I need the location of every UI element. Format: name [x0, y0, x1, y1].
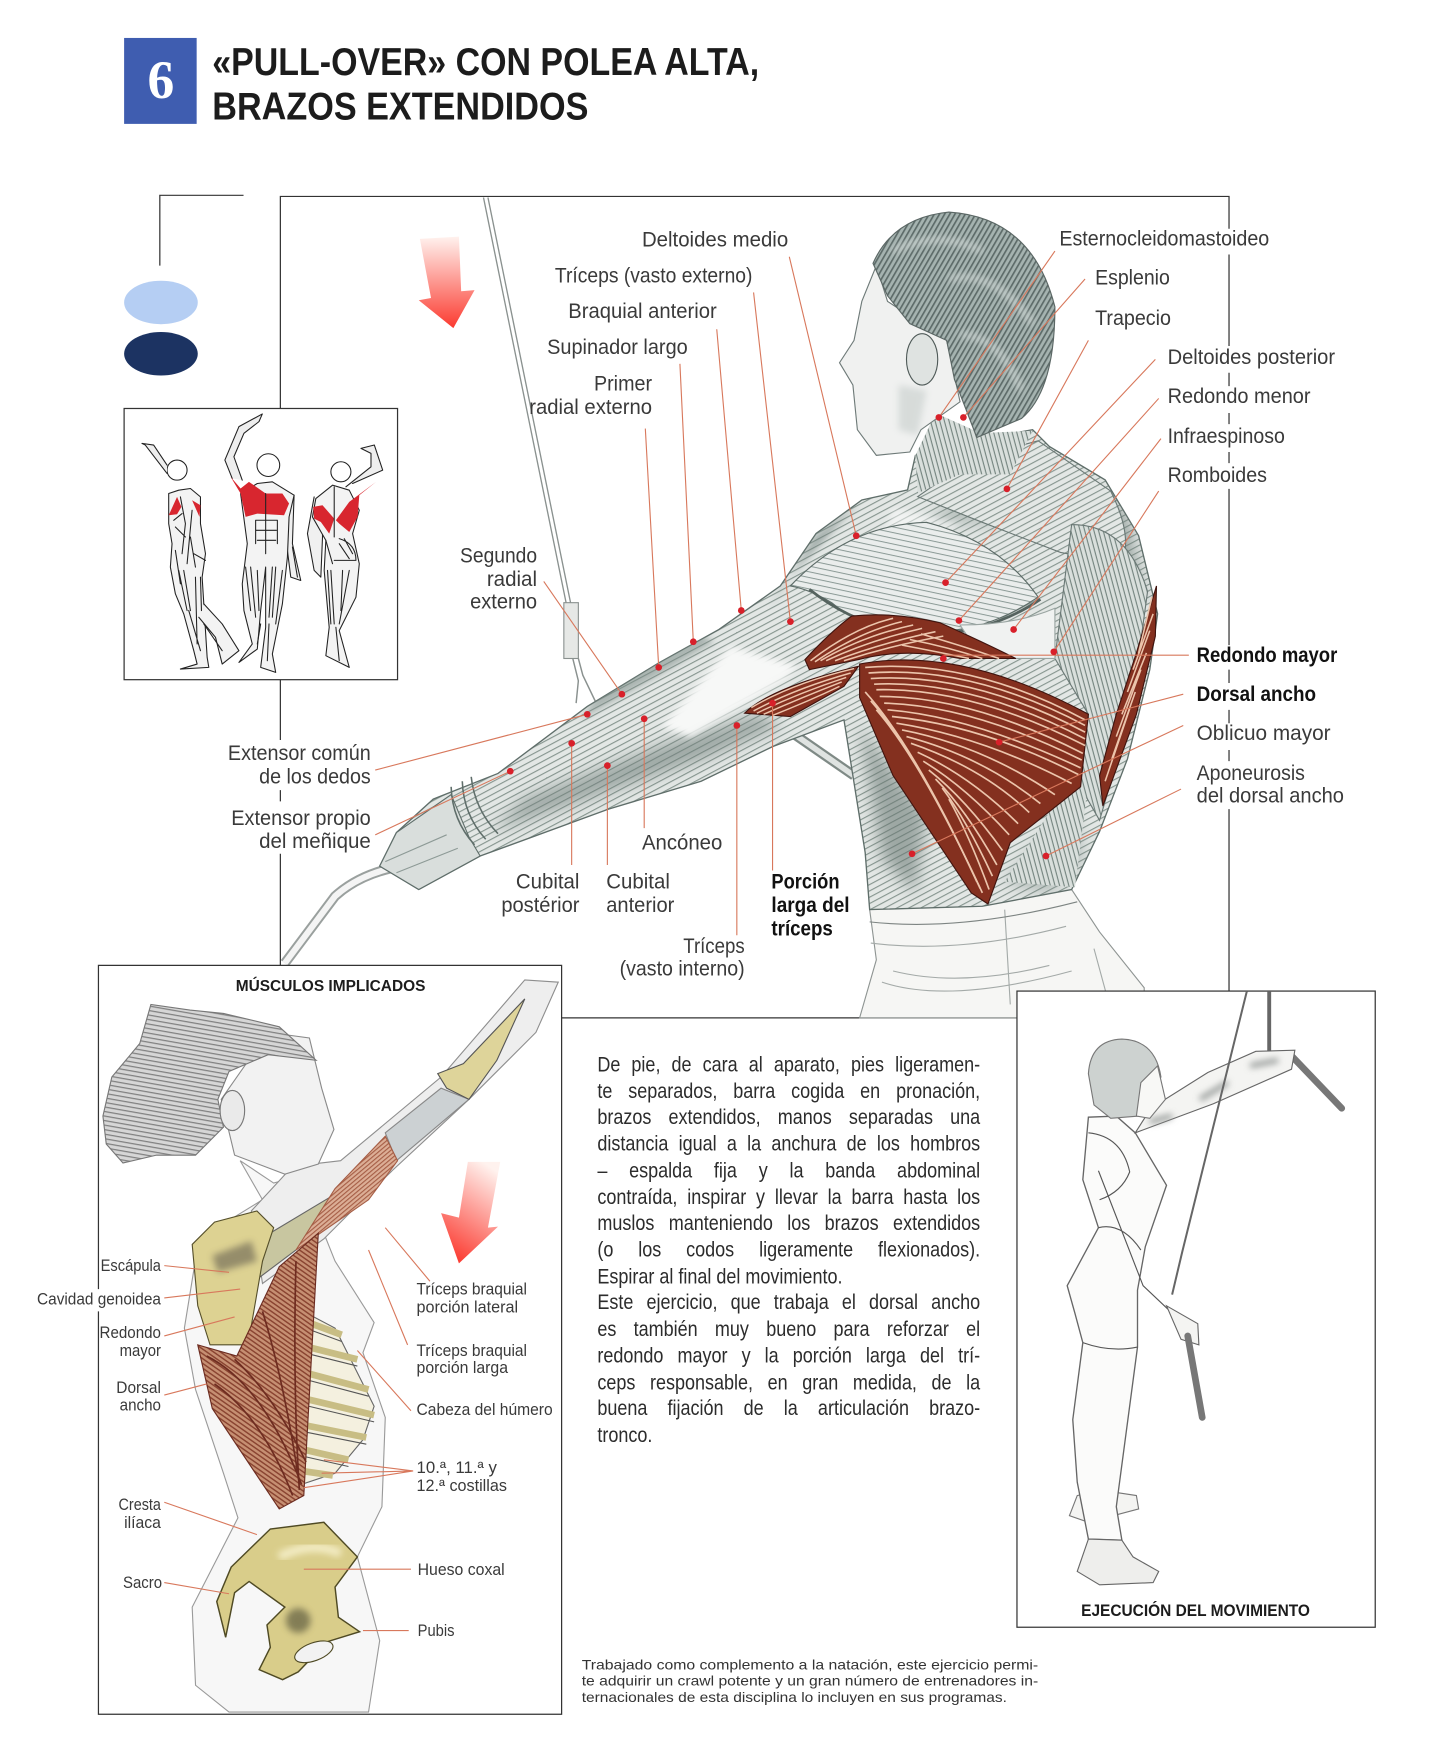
label: Trapecio: Trapecio — [1095, 307, 1171, 330]
label: Braquial anterior: Braquial anterior — [568, 300, 717, 323]
teres major — [805, 615, 1016, 670]
hair — [873, 212, 1055, 438]
title — [212, 41, 759, 128]
label: Porción larga del tríceps: Porción — [771, 870, 840, 893]
label: Extensor común de los dedos — [228, 742, 371, 788]
label: Segundo radial externo: radial — [487, 568, 537, 591]
oblique — [1100, 586, 1156, 806]
label: Segundo radial externo: Segundo — [460, 544, 537, 567]
face — [1136, 1066, 1165, 1118]
label: Redondo mayor: Redondo — [100, 1324, 161, 1342]
text block: exercise description: buena fijación de la articulación brazo- — [597, 1398, 980, 1421]
label: Dorsal ancho — [116, 1379, 161, 1415]
label: Aponeurosis del dorsal ancho: del dorsal ancho — [1197, 784, 1344, 807]
text block: exercise description: Este ejercicio, que trabaja el dorsal ancho — [597, 1292, 980, 1315]
label: Primer radial externo: radial externo — [529, 396, 652, 419]
arm tendons — [385, 1088, 469, 1161]
legend: muscle colour ovals — [124, 281, 198, 376]
label: Cubital anterior — [606, 870, 674, 917]
cable — [1172, 991, 1247, 1295]
text block: exercise description: Espirar al final del movimiento. — [597, 1265, 842, 1289]
title: «PULL-OVER» CON POLEA ALTA, — [212, 41, 759, 84]
lower abdomen shading — [1005, 781, 1088, 887]
tonal shading — [491, 469, 1144, 893]
leader lines — [164, 1228, 430, 1631]
label: Esternocleidomastoideo: Esternocleidomastoideo — [1059, 228, 1269, 251]
text block: exercise description: distancia igual a la anchura de los hombros — [597, 1133, 980, 1156]
ear — [220, 1090, 245, 1131]
panel: muscles involved — [37, 965, 562, 1714]
front shoe — [1077, 1539, 1159, 1585]
label: Cavidad genoidea: Cavidad genoidea — [37, 1291, 161, 1309]
label: Cubital anterior: Cubital — [606, 870, 670, 893]
pelvis — [217, 1522, 360, 1680]
label: Extensor propio del meñique — [231, 807, 371, 853]
label: Infraespinoso: Infraespinoso — [1168, 425, 1285, 448]
lower hand — [1167, 1306, 1199, 1345]
text block: exercise description: brazos extendidos, manos separadas una — [597, 1107, 980, 1130]
label: Ancóneo: Ancóneo — [642, 831, 722, 854]
ear — [906, 334, 938, 385]
label: Tríceps vasto interno: (vasto interno) — [620, 957, 745, 980]
label: Dorsal ancho: ancho — [120, 1397, 161, 1415]
woman body silhouette — [184, 1161, 391, 1712]
label: Cubital postérior: Cubital — [516, 870, 579, 893]
trapezius — [918, 441, 1126, 564]
heading: ejecución del movimiento: EJECUCIÓN DEL MOVIMIENTO — [1081, 1601, 1310, 1620]
hair highlights — [893, 240, 1033, 391]
text block: exercise description: (o los codos ligeramente flexionados). — [597, 1239, 980, 1262]
figure: front view — [225, 414, 301, 672]
label: Segundo radial externo: externo — [470, 590, 537, 613]
arm bones — [438, 999, 525, 1099]
label: Supinador largo: Supinador largo — [547, 336, 688, 359]
scapula — [192, 1211, 274, 1345]
cable and pulley — [483, 198, 596, 703]
label: Redondo mayor: mayor — [120, 1342, 162, 1360]
main illustration: man performing pull-over — [285, 198, 1158, 1018]
rear foot — [1069, 1490, 1139, 1522]
text block: exercise description: contraída, inspirar y llevar la barra hasta los — [597, 1186, 980, 1209]
label: Esplenio: Esplenio — [1095, 267, 1170, 290]
latissimus dorsi — [198, 1233, 318, 1509]
label: Extensor propio del meñique: Extensor propio — [231, 807, 371, 830]
label: Tríceps braquial porción larga: Tríceps braquial — [417, 1342, 527, 1360]
raised arm — [1135, 1050, 1295, 1133]
text block: exercise description: te separados, barra cogida en pronación, — [597, 1080, 980, 1103]
label: Cubital postérior: postérior — [501, 894, 579, 917]
label: Cabeza del húmero: Cabeza del húmero — [417, 1401, 553, 1419]
text block: exercise description: muslos manteniendo los brazos extendidos — [597, 1212, 980, 1236]
ribs — [293, 1306, 374, 1484]
triceps long head — [745, 666, 858, 717]
arrow: downward motion — [441, 1162, 500, 1263]
forearm tendon highlight — [662, 646, 798, 737]
arm shading — [1150, 1060, 1278, 1122]
torso and arm silhouette — [380, 430, 1158, 910]
text block: exercise description: tronco. — [597, 1424, 652, 1448]
label: Extensor propio del meñique: del meñique — [259, 830, 371, 853]
deltoid and shoulder muscle mass — [790, 522, 1038, 631]
label: Romboides: Romboides — [1168, 464, 1267, 487]
heading: músculos implicados: MÚSCULOS IMPLICADOS — [236, 976, 425, 995]
text block: exercise description: De pie, de cara al aparato, pies ligeramen- — [597, 1054, 980, 1077]
neck — [915, 413, 1033, 493]
pants — [860, 890, 1144, 1018]
label: Aponeurosis del dorsal ancho: Aponeurosis — [1197, 762, 1305, 785]
number badge: 6 — [148, 50, 174, 110]
label: Redondo mayor — [100, 1324, 162, 1360]
pulley fitting — [1256, 991, 1284, 1056]
label: Porción larga del tríceps: tríceps — [771, 917, 833, 940]
label: Tríceps braquial porción larga — [417, 1342, 527, 1377]
number badge — [124, 38, 197, 124]
label: Dorsal ancho: Dorsal — [116, 1379, 161, 1397]
label: costillas — [417, 1459, 507, 1495]
text block: swimming note: Trabajado como complemento a la natación, este ejercicio permi- — [582, 1657, 1039, 1673]
text block: exercise description: ceps responsable, en gran medida, de la — [597, 1371, 980, 1395]
label: Tríceps braquial porción lateral — [417, 1281, 527, 1316]
label: Cubital anterior: anterior — [606, 894, 674, 917]
face — [840, 266, 960, 455]
label: Porción larga del tríceps — [771, 870, 850, 940]
label: Tríceps braquial porción lateral: Tríceps braquial — [417, 1281, 527, 1299]
body lines — [1083, 1133, 1183, 1349]
label: Sacro: Sacro — [123, 1574, 162, 1592]
label: costillas: 10.ª, 11.ª y — [417, 1459, 498, 1477]
hair — [103, 1004, 316, 1163]
leader lines and dots: main figure — [375, 251, 1189, 935]
label: Tríceps vasto interno — [620, 935, 745, 980]
label: Primer radial externo — [529, 373, 652, 419]
label: Porción larga del tríceps: larga del — [771, 894, 850, 917]
text block: swimming note: te adquirir un crawl potente y un gran número de entrenadores in- — [582, 1672, 1039, 1688]
label: Cresta ilíaca: ilíaca — [124, 1514, 161, 1532]
label: Extensor común de los dedos: de los dedos — [259, 765, 371, 788]
label: Redondo mayor: Redondo mayor — [1197, 644, 1337, 667]
label: Oblicuo mayor: Oblicuo mayor — [1197, 722, 1331, 745]
label: Cubital postérior — [501, 870, 579, 917]
label: Tríceps braquial porción larga: porción larga — [417, 1359, 508, 1377]
label: Escápula: Escápula — [101, 1257, 161, 1275]
label: Hueso coxal: Hueso coxal — [418, 1561, 505, 1579]
label: Deltoides medio: Deltoides medio — [642, 229, 788, 252]
panel: small anatomy figures — [124, 408, 398, 680]
label: costillas: 12.ª costillas — [417, 1477, 507, 1495]
labels: main figure — [228, 228, 1344, 980]
label: Dorsal ancho: Dorsal ancho — [1197, 683, 1316, 706]
text block: swimming note — [582, 1657, 1039, 1705]
face shading — [899, 385, 927, 435]
figures drawn in local coordinates — [142, 414, 383, 672]
hand and wrist — [380, 777, 498, 890]
text block: swimming note: ternacionales de esta disciplina lo incluyen en sus programas. — [582, 1689, 1007, 1705]
arm muscles — [296, 1136, 398, 1250]
humerus and shoulder shading — [251, 1194, 355, 1283]
label: Cresta ilíaca: Cresta — [119, 1496, 161, 1514]
text block: exercise description: es también muy bueno para reforzar el — [597, 1318, 980, 1342]
woman body outline — [1067, 1116, 1167, 1540]
label: Tríceps braquial porción lateral: porción lateral — [417, 1298, 518, 1316]
infraspinatus pale area — [960, 608, 1055, 658]
head — [221, 1032, 334, 1174]
head and hair — [1088, 1039, 1161, 1118]
shadow under deltoid — [809, 589, 1040, 633]
figure: back view — [307, 445, 383, 667]
bar top — [1292, 1056, 1342, 1108]
text block: exercise description: – espalda fija y la banda abdominal — [597, 1159, 980, 1183]
text block: exercise description — [597, 1052, 982, 1465]
arrow: downward motion — [419, 237, 475, 328]
label: Aponeurosis del dorsal ancho — [1197, 762, 1344, 807]
label: Cresta ilíaca — [119, 1496, 161, 1532]
label: Deltoides posterior: Deltoides posterior — [1168, 346, 1335, 369]
label: Redondo menor: Redondo menor — [1168, 385, 1310, 408]
label: Tríceps vasto externo: Tríceps (vasto externo) — [555, 264, 752, 287]
back muscle block — [1055, 525, 1148, 820]
header: number badge and title — [124, 38, 759, 128]
pelvic foramen — [292, 1637, 336, 1667]
label: Segundo radial externo — [460, 544, 537, 613]
label: Primer radial externo: Primer — [594, 373, 652, 396]
arm — [251, 980, 558, 1283]
title: BRAZOS EXTENDIDOS — [212, 85, 588, 128]
bar — [285, 725, 854, 963]
label: Extensor común de los dedos: Extensor común — [228, 742, 371, 765]
label: Tríceps vasto interno: Tríceps — [683, 935, 745, 958]
panel: movement execution — [1017, 991, 1375, 1627]
figure: side view — [142, 443, 239, 669]
lower bar — [1188, 1336, 1202, 1417]
label: Pubis: Pubis — [418, 1622, 454, 1640]
latissimus dorsi — [860, 660, 1088, 904]
text block: exercise description: redondo mayor y la porción larga del trí- — [597, 1345, 980, 1368]
